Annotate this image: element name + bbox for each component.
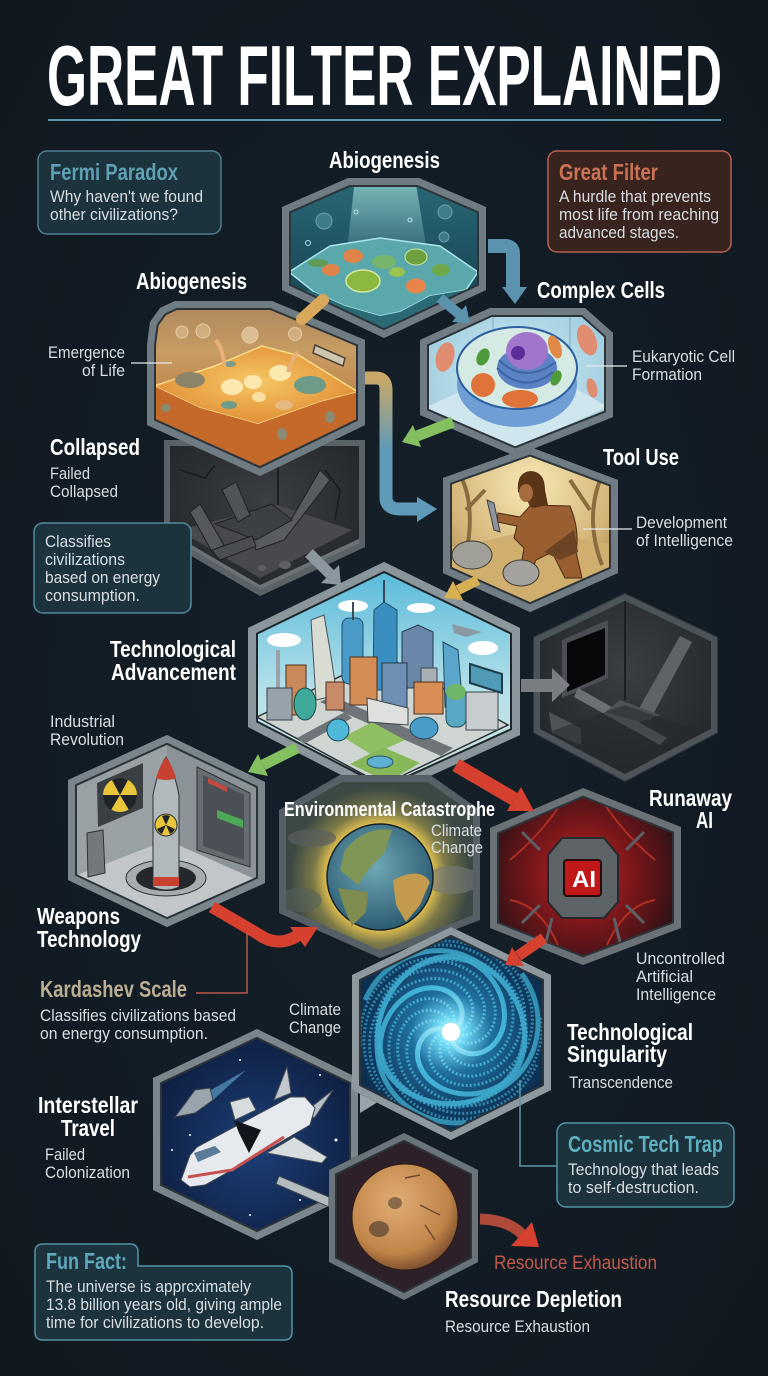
panel: Cosmic Tech Trap: Cosmic Tech Trap <box>568 1131 723 1157</box>
label: Climate Change on earth: Climate <box>431 821 482 840</box>
text block: Kardashev Scale <box>40 933 247 1043</box>
label: Technological Singularity <box>567 1019 693 1092</box>
panel: Fermi Paradox <box>38 151 221 234</box>
label: Abiogenesis top: Abiogenesis <box>329 147 440 173</box>
hexagon: abiogenesis orange soup <box>143 297 369 479</box>
arrow: red city to AI <box>456 765 534 811</box>
label: Runaway AI <box>649 785 732 833</box>
panel: classifies civilizations <box>34 523 191 613</box>
hexagon: runaway AI <box>486 784 686 968</box>
label: Uncontrolled Artificial Intelligence <box>636 949 725 1004</box>
arrow: tan-blue soup to tool use <box>365 378 437 522</box>
label: Emergence of Life: Emergence <box>48 343 125 362</box>
hexagon: interstellar travel shuttle <box>149 1025 362 1245</box>
debris: shuttle piece <box>276 1176 329 1207</box>
arrow: blue pool to cell small <box>440 298 470 323</box>
label: Uncontrolled Artificial Intelligence: Uncontrolled <box>636 949 725 968</box>
hexagon: collapsed ruin right <box>530 590 722 786</box>
label: Collapsed: Failed <box>50 464 90 483</box>
arrow: green city to rocket <box>248 748 297 776</box>
label: Resource Depletion <box>445 1286 622 1336</box>
label: Technological Advancement <box>110 636 236 685</box>
panel: Cosmic Tech Trap: Technology that leads <box>568 1160 719 1179</box>
panel: classifies civilizations: civilizations <box>45 550 125 569</box>
label: Technological Advancement: Technological <box>110 636 236 662</box>
panel: classifies civilizations: based on energy <box>45 568 160 587</box>
panel: Cosmic Tech Trap: to self-destruction. <box>568 1178 699 1197</box>
panel: Fermi Paradox: Fermi Paradox <box>50 159 178 185</box>
hexagon: tool use early human <box>440 443 622 615</box>
label: Interstellar Travel: Colonization <box>45 1163 130 1182</box>
label: Tool Use: Tool Use <box>603 444 679 470</box>
label: Weapons Technology: Weapons <box>37 903 120 929</box>
label: Climate Change on earth <box>431 821 483 857</box>
label: Industrial Revolution: Revolution <box>50 730 124 749</box>
label: Development of Intelligence: Development <box>636 513 727 532</box>
panel: Great Filter: Great Filter <box>559 159 658 185</box>
arrow: red rocket to earth <box>212 907 318 947</box>
label: Environmental Catastrophe: Environmental Catastrophe <box>284 799 495 821</box>
arrow: red from planet to resource exhaustion <box>480 1219 539 1247</box>
panel: Fun Fact: Fun Fact: <box>46 1248 127 1274</box>
arrow: grey city to ruin <box>521 668 570 702</box>
label: Climate Change: Change <box>289 1018 341 1037</box>
label: Resource Depletion: Resource Depletion <box>445 1286 622 1312</box>
hexagon: technological advancement city <box>248 562 520 776</box>
panel: Great Filter: advanced stages. <box>559 223 679 242</box>
arrow: tan from soup to pool <box>302 300 323 319</box>
arrow: grey collapsed to city <box>309 553 341 585</box>
panel: Fermi Paradox: other civilizations? <box>50 205 178 224</box>
label: Climate Change on earth: Change <box>431 838 483 857</box>
label: Interstellar Travel: Interstellar <box>38 1092 138 1118</box>
panel: Great Filter: A hurdle that prevents <box>559 187 711 206</box>
hexagon: resource depletion planet <box>325 1129 482 1304</box>
hexagon: collapsed civilization ruins left <box>160 435 370 600</box>
label: Interstellar Travel: Travel <box>61 1115 115 1141</box>
label: Weapons Technology <box>37 903 141 952</box>
label: Abiogenesis left: Abiogenesis <box>136 268 247 294</box>
label: Climate Change <box>289 1000 341 1037</box>
label: Climate Change: Climate <box>289 1000 341 1019</box>
label: Technological Singularity: Technological <box>567 1019 693 1045</box>
panel: classifies civilizations: Classifies <box>45 532 111 551</box>
label: Resource Depletion: Resource Exhaustion <box>445 1317 590 1336</box>
label: Uncontrolled Artificial Intelligence: Intelligence <box>636 985 716 1004</box>
text block: Kardashev Scale: on energy consumption. <box>40 1024 208 1043</box>
label: Complex Cells: Complex Cells <box>537 277 665 303</box>
hexagon: environmental catastrophe earth <box>275 770 485 962</box>
hexagon: weapons technology rocket room <box>64 731 270 931</box>
panel: Fermi Paradox: Why haven't we found <box>50 187 203 206</box>
arrow: red AI to singularity <box>505 938 544 966</box>
chip label AI: AI <box>572 866 596 892</box>
label: Collapsed <box>50 434 140 501</box>
panel: Fun Fact: 13.8 billion years old, giving ample <box>46 1295 282 1314</box>
hexagon: technological singularity spiral <box>352 927 551 1140</box>
panel: Fun Fact: time for civilizations to develop. <box>46 1313 264 1332</box>
label: Eukaryotic Cell Formation: Eukaryotic Cell <box>632 347 735 366</box>
arrow: blue from pool to complex cells <box>488 246 527 304</box>
label: Industrial Revolution <box>50 712 124 749</box>
label: Resource Exhaustion red: Resource Exhaustion <box>494 1253 657 1274</box>
label: Emergence of Life <box>48 343 172 380</box>
label: Emergence of Life: of Life <box>82 361 125 380</box>
label: Technological Singularity: Transcendence <box>569 1073 673 1092</box>
arrow: yellow tool use to city <box>444 580 478 600</box>
label: Interstellar Travel: Failed <box>45 1145 85 1164</box>
label: Development of Intelligence: of Intelligence <box>636 531 733 550</box>
label: Collapsed: Collapsed <box>50 434 140 460</box>
label: Interstellar Travel <box>38 1092 138 1182</box>
panel: Great Filter <box>548 151 731 252</box>
arrow: green cell to collapsed <box>402 422 453 447</box>
text block: Kardashev Scale: Classifies civilizations based <box>40 1006 236 1025</box>
panel: Great Filter: most life from reaching <box>559 205 719 224</box>
label: Technological Advancement: Advancement <box>111 659 236 685</box>
label: Technological Singularity: Singularity <box>567 1041 667 1067</box>
label: Runaway AI: Runaway <box>649 785 732 811</box>
label: Eukaryotic Cell Formation: Formation <box>632 365 702 384</box>
label: Eukaryotic Cell Formation <box>586 347 735 384</box>
hexagon: complex cell <box>416 304 616 460</box>
panel: Fun Fact <box>35 1244 292 1340</box>
label: Development of Intelligence <box>583 513 733 550</box>
label: Uncontrolled Artificial Intelligence: Artificial <box>636 967 693 986</box>
label: Industrial Revolution: Industrial <box>50 712 115 731</box>
label: Collapsed: Collapsed <box>50 482 118 501</box>
label: Weapons Technology: Technology <box>37 926 141 952</box>
text block: Kardashev Scale: Kardashev Scale <box>40 976 187 1002</box>
panel: Cosmic Tech Trap <box>520 1080 734 1207</box>
panel: classifies civilizations: consumption. <box>45 586 140 605</box>
panel: Fun Fact: The universe is apprcximately <box>46 1277 251 1296</box>
label: Runaway AI: AI <box>696 807 713 833</box>
connector: ship to singularity <box>360 1087 386 1113</box>
hexagon: abiogenesis primordial pool <box>278 174 490 344</box>
